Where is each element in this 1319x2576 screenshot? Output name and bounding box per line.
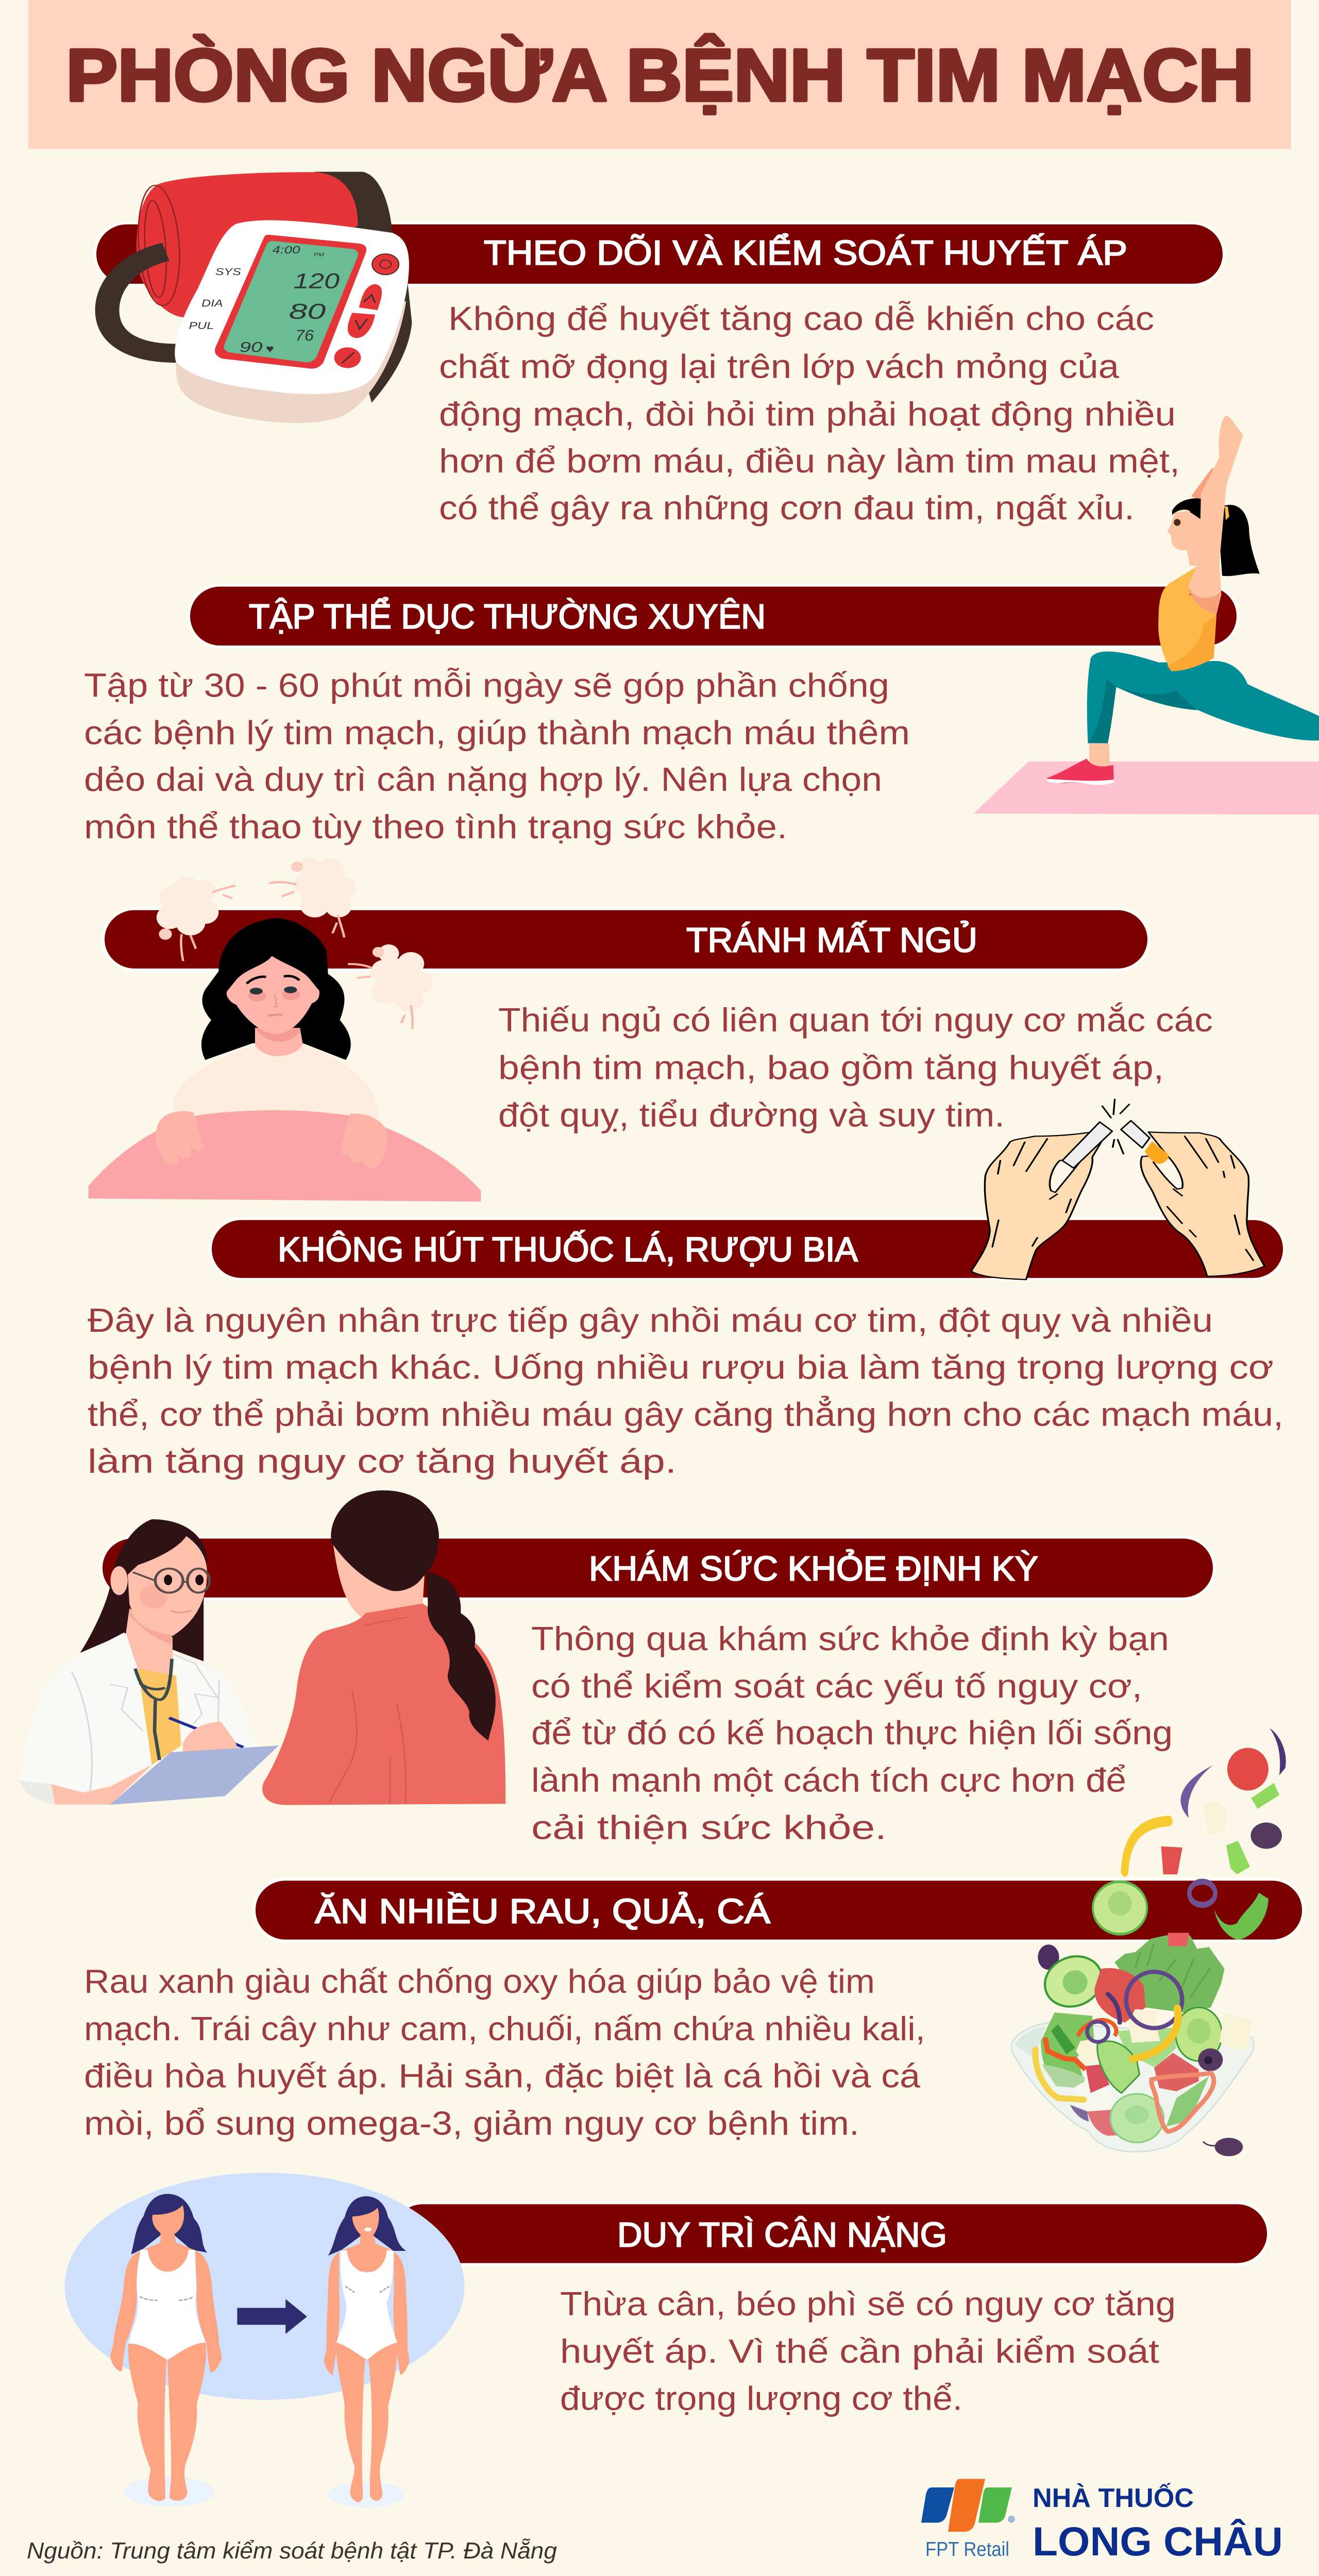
icon: blood pressure monitor: 80 [289,299,326,324]
icon: blood pressure monitor: 76 [295,328,314,344]
icon: blood pressure monitor: DIA [201,298,223,309]
text block: health check-up: Thông qua khám sức khỏe định kỳ bạn [531,1620,1169,1657]
illustration: woman doing yoga lunge [973,416,1319,815]
text block: exercise: môn thể thao tùy theo tình trạng sức khỏe. [84,808,787,845]
icon: blood pressure monitor: PM [314,251,324,258]
source note: Nguồn: Trung tâm kiểm soát bệnh tật TP. Đà Nẵng [27,2537,557,2564]
heading bar: no smoking or alcohol: KHÔNG HÚT THUỐC LÁ, RƯỢU BIA [278,1231,858,1269]
text block: maintain weight [560,2285,1176,2417]
icon: blood pressure monitor [107,172,412,423]
heading bar: vegetables, fruit, fish: ĂN NHIỀU RAU, QUẢ, CÁ [315,1892,770,1930]
illustration: sleepless woman with sheep [89,857,481,1201]
text block: exercise [84,667,910,845]
heading bar: maintain weight: DUY TRÌ CÂN NẶNG [617,2216,947,2254]
text block: smoking and alcohol [88,1302,1283,1480]
heading bar: maintain weight [392,2202,1269,2265]
heading bar: health check-up: KHÁM SỨC KHỎE ĐỊNH KỲ [589,1550,1038,1588]
logo: FPT Retail Nhà thuốc Long Châu: NHÀ THUỐC [1033,2483,1194,2513]
text block: diet [84,1963,925,2142]
text block: maintain weight: Thừa cân, béo phì sẽ có nguy cơ tăng [560,2285,1176,2323]
text block: blood pressure: chất mỡ đọng lại trên lớp vách mỏng của [439,348,1120,385]
text block: blood pressure: hơn để bơm máu, điều này làm tim mau mệt, [439,443,1180,480]
text block: sleep: đột quỵ, tiểu đường và suy tim. [498,1096,1005,1133]
text block: maintain weight: được trọng lượng cơ thể. [560,2380,962,2417]
logo: FPT Retail Nhà thuốc Long Châu [921,2479,1283,2564]
text block: smoking and alcohol: thể, cơ thể phải bơm nhiều máu gây căng thẳng hơn cho các mạch máu, [88,1396,1283,1433]
text block: health check-up: để từ đó có kế hoạch thực hiện lối sống [531,1714,1173,1752]
text block: diet: mạch. Trái cây như cam, chuối, nấm chứa nhiều kali, [84,2010,925,2047]
text block: smoking and alcohol: Đây là nguyên nhân trực tiếp gây nhồi máu cơ tim, đột quỵ và nhiều [88,1302,1213,1339]
text block: exercise: các bệnh lý tim mạch, giúp thành mạch máu thêm [84,714,910,751]
text block: sleep: Thiếu ngủ có liên quan tới nguy cơ mắc các [498,1002,1213,1039]
title banner: PHÒNG NGỪA BỆNH TIM MẠCH [66,33,1254,116]
text block: sleep: bệnh tim mạch, bao gồm tăng huyết áp, [498,1049,1164,1087]
heading bar: vegetables, fruit, fish [254,1879,1304,1941]
text block: sleep [498,1002,1213,1133]
text block: blood pressure: động mạch, đòi hỏi tim phải hoạt động nhiều [439,396,1176,433]
text block: maintain weight: huyết áp. Vì thế cần phải kiểm soát [560,2333,1159,2370]
text block: exercise: Tập từ 30 - 60 phút mỗi ngày sẽ góp phần chống [84,667,889,704]
text block: diet: mòi, bổ sung omega-3, giảm nguy cơ bệnh tim. [84,2105,859,2142]
text block: smoking and alcohol: bệnh lý tim mạch khác. Uống nhiều rượu bia làm tăng trọng lượng cơ [88,1348,1274,1386]
heading bar: exercise: TẬP THỂ DỤC THƯỜNG XUYÊN [249,598,766,636]
logo: FPT Retail Nhà thuốc Long Châu: FPT Retail [925,2538,1009,2561]
text block: blood pressure: có thể gây ra những cơn đau tim, ngất xỉu. [439,489,1135,527]
text block: diet: Rau xanh giàu chất chống oxy hóa giúp bảo vệ tim [84,1963,875,2000]
icon: blood pressure monitor: 90 [240,339,263,355]
heading bar: blood pressure [95,223,1224,285]
heading bar: exercise [189,585,1238,647]
text block: health check-up: lành mạnh một cách tích cực hơn để [531,1761,1126,1799]
icon: blood pressure monitor: 120 [294,269,340,293]
text block: blood pressure: Không để huyết tăng cao dễ khiến cho các [448,300,1154,337]
icon: blood pressure monitor: PUL [189,320,214,331]
heading bar: sleep: TRÁNH MẤT NGỦ [686,921,977,959]
title banner [28,0,1291,149]
heading bar: health check-up [101,1537,1214,1599]
text block: smoking and alcohol: làm tăng nguy cơ tăng huyết áp. [88,1443,677,1480]
text block: health check-up [531,1620,1173,1846]
text block: health check-up: cải thiện sức khỏe. [531,1809,887,1846]
logo: FPT Retail Nhà thuốc Long Châu: LONG CHÂU [1033,2519,1283,2564]
illustration: weight loss before and after [64,2173,465,2507]
text block: exercise: dẻo dai và duy trì cân nặng hợp lý. Nên lựa chọn [84,761,882,798]
illustration: doctor and patient [19,1490,505,1805]
icon: blood pressure monitor: SYS [215,266,241,277]
heading bar: sleep [103,909,1149,970]
text block: health check-up: có thể kiểm soát các yếu tố nguy cơ, [531,1668,1142,1705]
illustration: falling salad ingredients [1093,1728,1286,1940]
text block: blood pressure [439,300,1180,527]
heading bar: no smoking or alcohol [210,1218,1284,1279]
illustration: hands breaking a cigarette [971,1099,1264,1280]
illustration: salad bowl [1011,1933,1254,2156]
text block: diet: điều hòa huyết áp. Hải sản, đặc biệt là cá hồi và cá [84,2057,921,2095]
icon: blood pressure monitor: 4:00 [273,244,300,256]
icon: blood pressure monitor: ♥ [266,343,274,355]
heading bar: blood pressure: THEO DÕI VÀ KIỂM SOÁT HUYẾT ÁP [484,234,1127,272]
